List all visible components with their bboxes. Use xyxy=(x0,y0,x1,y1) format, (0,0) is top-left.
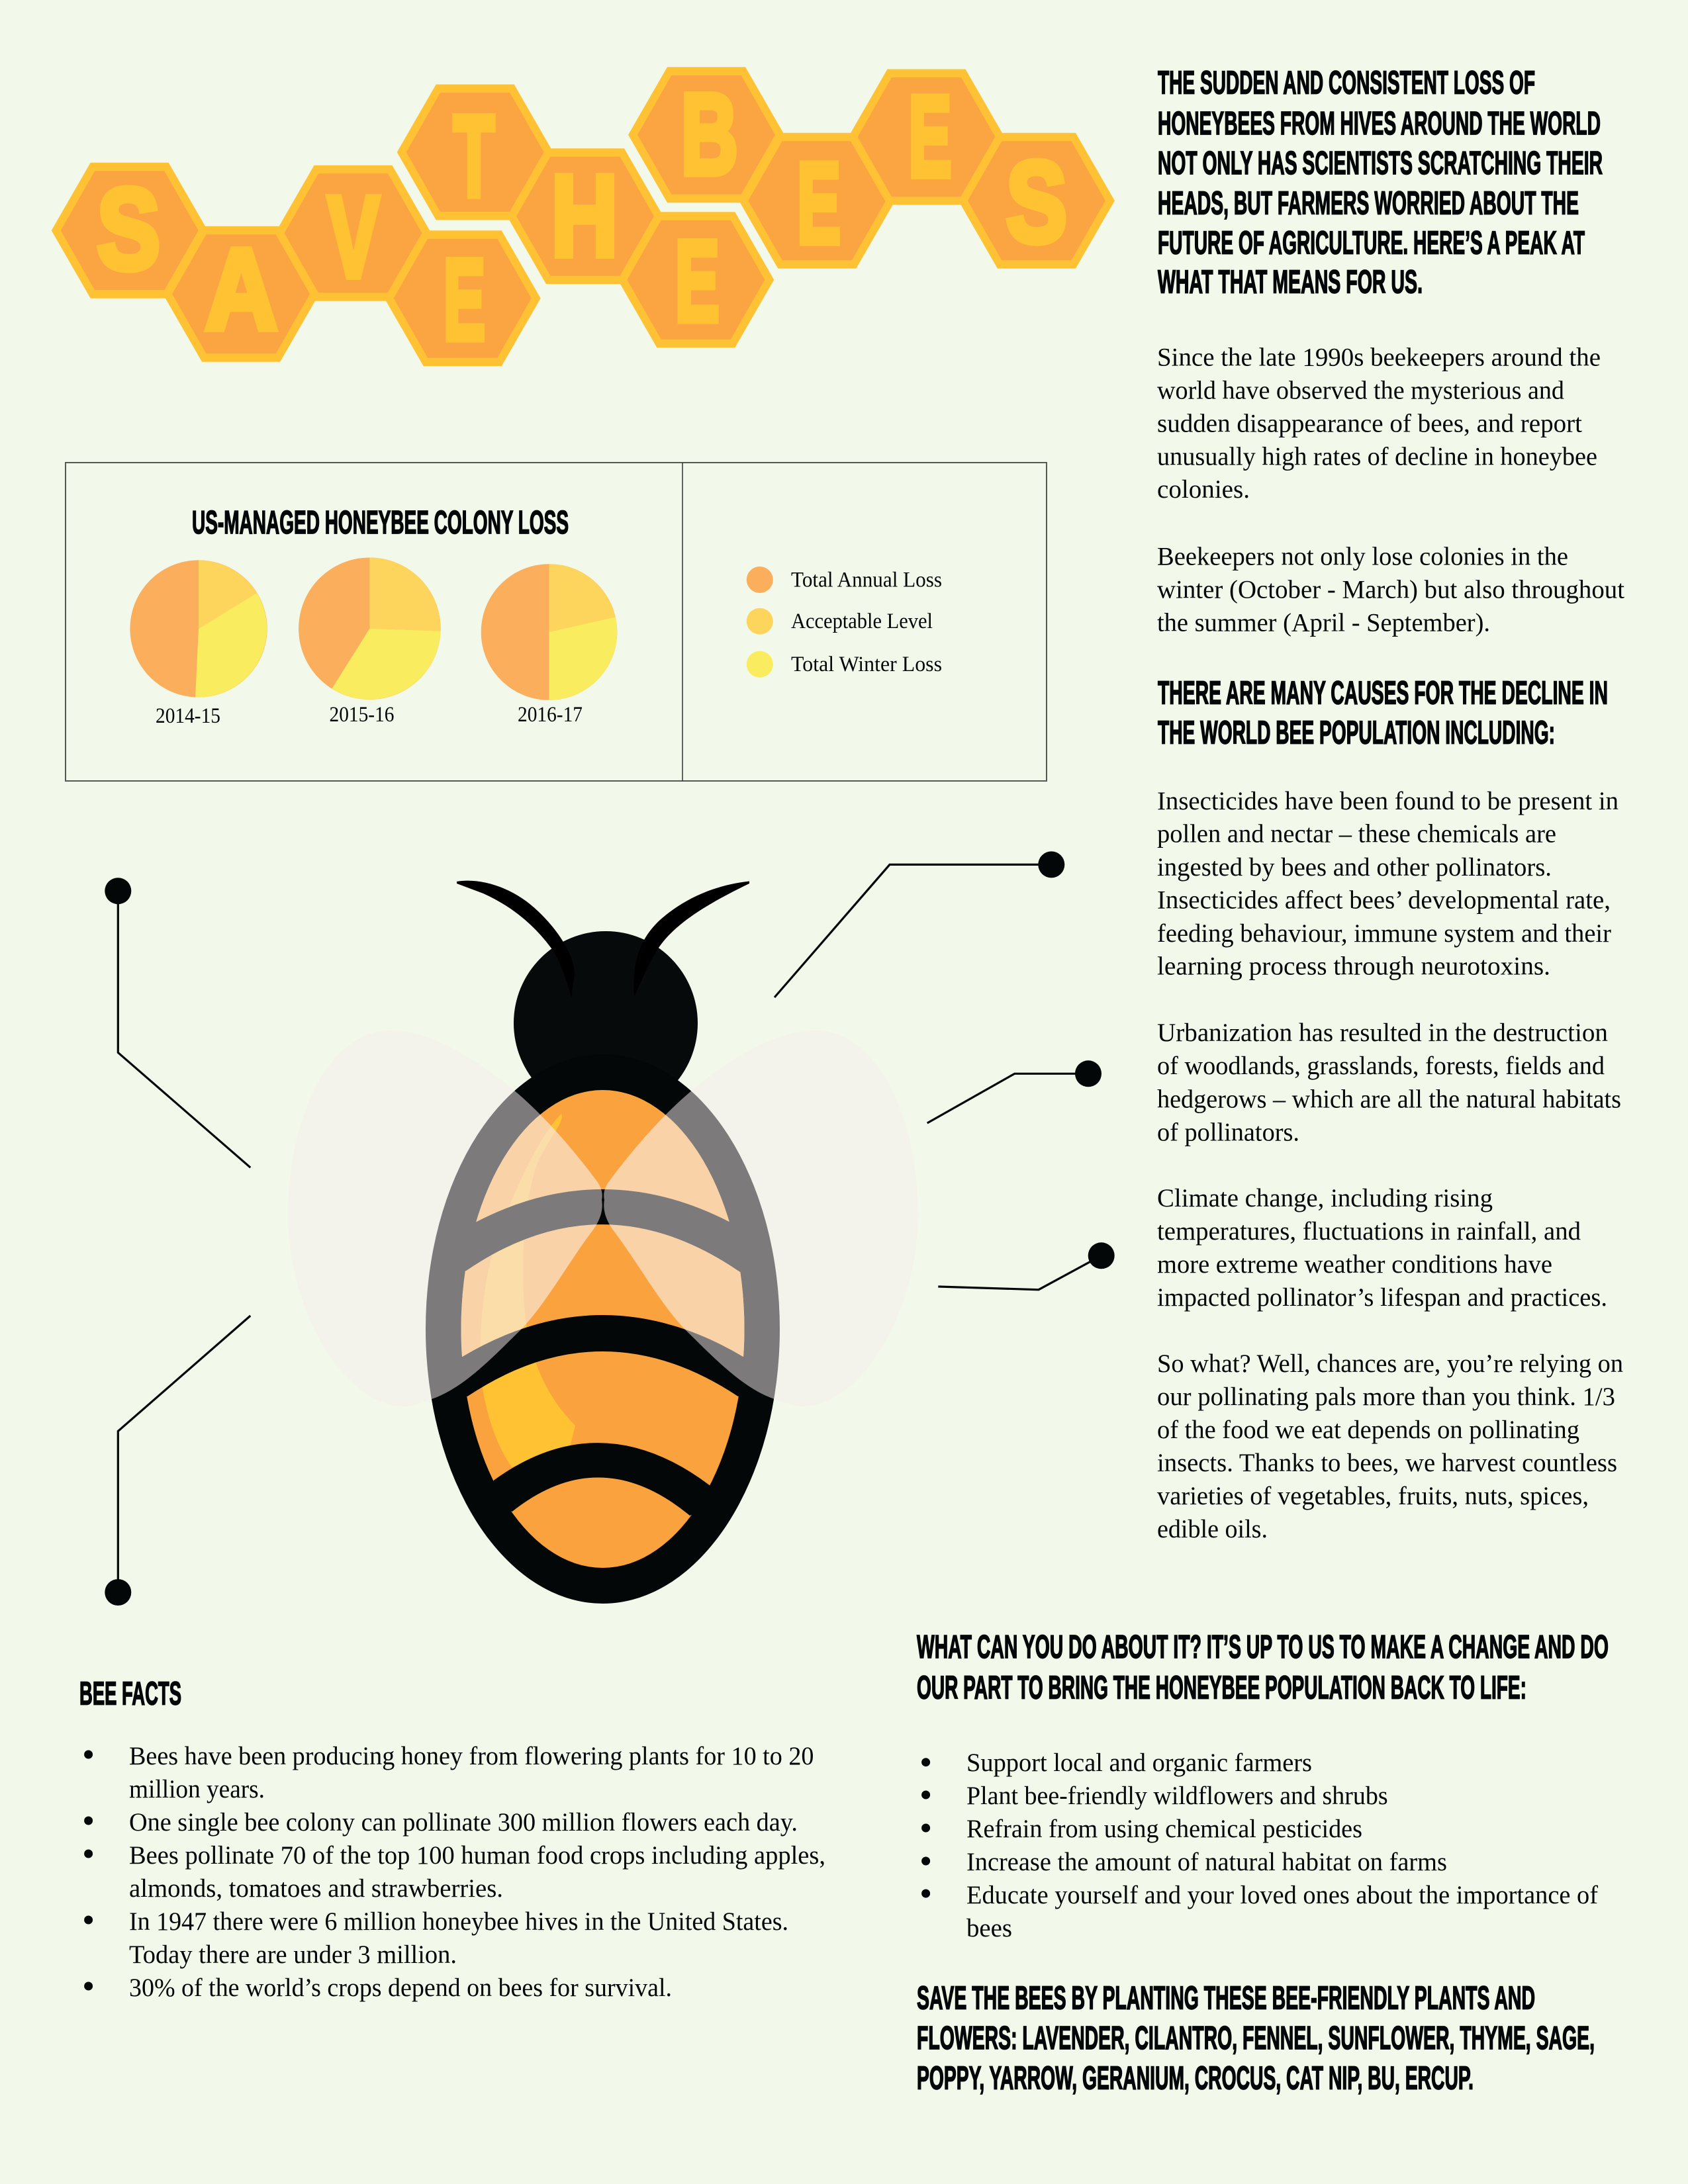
paragraph: since the late 1990s: world have observed the mysterious and xyxy=(1157,376,1564,404)
heading: causes of decline xyxy=(1158,675,1608,751)
body stripes xyxy=(434,1189,771,1516)
bee head xyxy=(514,931,698,1115)
list: actions: bees xyxy=(966,1914,1012,1942)
hexagon letter: H xyxy=(507,148,663,284)
legend: Acceptable Level xyxy=(791,610,933,633)
pie chart: 2015-16 xyxy=(299,557,441,700)
hexagon letter: A: A xyxy=(205,225,277,353)
paragraph: climate change xyxy=(1157,1184,1607,1312)
list: bee facts: 30% of the world’s crops depend on bees for survival. xyxy=(129,1974,672,2002)
paragraph: so what: varieties of vegetables, fruits, nuts, spices, xyxy=(1157,1482,1589,1510)
paragraph: urbanization: hedgerows – which are all the natural habitats xyxy=(1157,1085,1621,1114)
hexagon letter: E: E xyxy=(444,236,485,364)
heading: bee-friendly plants xyxy=(917,1980,1595,2096)
hexagon letter: E xyxy=(849,69,1005,205)
list: bee facts xyxy=(84,1742,825,2002)
list: bee facts: almonds, tomatoes and strawberries. xyxy=(129,1874,503,1903)
bee illustration xyxy=(426,880,780,1604)
hexagon letter: V: V xyxy=(328,173,380,301)
paragraph: insecticides xyxy=(1157,787,1618,981)
list: bee facts: In 1947 there were 6 million honeybee hives in the United States. xyxy=(129,1907,788,1936)
body under wings xyxy=(461,1115,744,1357)
paragraph: urbanization: of woodlands, grasslands, forests, fields and xyxy=(1157,1052,1605,1080)
list: actions: Support local and organic farmers xyxy=(966,1749,1312,1777)
hexagon letter: E: E xyxy=(797,139,841,267)
callout: upper right xyxy=(774,851,1064,997)
paragraph: beekeepers lose colonies xyxy=(1157,543,1624,637)
legend: Total Annual Loss xyxy=(791,569,942,592)
paragraph: insecticides: feeding behaviour, immune system and their xyxy=(1157,919,1611,948)
paragraph: insecticides: Insecticides have been found to be present in xyxy=(1157,787,1618,815)
hexagon letter: E xyxy=(385,230,541,366)
hexagon letter: S: S xyxy=(97,165,160,293)
hexagon letter: E xyxy=(618,212,774,347)
title: Save the Bees honeycomb xyxy=(52,67,1115,366)
body orange xyxy=(461,1090,744,1568)
list: actions: Educate yourself and your loved ones about the importance of xyxy=(966,1881,1598,1909)
paragraph: beekeepers lose colonies: winter (October - March) but also throughout xyxy=(1157,575,1624,604)
paragraph: since the late 1990s: unusually high rates of decline in honeybee xyxy=(1157,442,1597,471)
hexagon letter: T xyxy=(397,85,553,220)
bee body xyxy=(426,1054,780,1604)
paragraph: so what: our pollinating pals more than you think. 1/3 xyxy=(1157,1383,1615,1411)
legend: Total Winter Loss xyxy=(791,653,942,676)
yellow highlight xyxy=(481,1114,575,1467)
list: bee facts: million years. xyxy=(129,1775,265,1803)
callout: lower left xyxy=(105,1316,250,1606)
left antenna xyxy=(457,881,575,997)
paragraph: insecticides: ingested by bees and other pollinators. xyxy=(1157,853,1552,882)
list: bee facts: One single bee colony can pollinate 300 million flowers each day. xyxy=(129,1808,798,1837)
paragraph: climate change: temperatures, fluctuations in rainfall, and xyxy=(1157,1217,1581,1246)
list: bee facts: Bees have been producing honey from flowering plants for 10 to 20 xyxy=(129,1742,814,1770)
list: actions xyxy=(921,1749,1598,1942)
list: actions: Refrain from using chemical pesticides xyxy=(966,1815,1362,1843)
list: bee facts: Today there are under 3 million. xyxy=(129,1940,457,1969)
paragraph: beekeepers lose colonies: Beekeepers not only lose colonies in the xyxy=(1157,543,1568,571)
hexagon letter: S: S xyxy=(1006,138,1067,266)
paragraph: so what: insects. Thanks to bees, we harvest countless xyxy=(1157,1449,1617,1477)
paragraph: since the late 1990s: Since the late 1990s beekeepers around the xyxy=(1157,343,1601,371)
year labels xyxy=(156,703,583,728)
callout: middle right xyxy=(927,1060,1102,1123)
heading: what can you do xyxy=(917,1629,1609,1706)
hexagon letter: T: T xyxy=(453,92,494,220)
paragraph: since the late 1990s: sudden disappearance of bees, and report xyxy=(1157,409,1582,437)
paragraph: beekeepers lose colonies: the summer (April - September). xyxy=(1157,609,1490,637)
intro heading xyxy=(1158,65,1603,300)
paragraph: so what xyxy=(1157,1349,1623,1543)
pie chart: 2016-17 xyxy=(481,564,617,700)
legend xyxy=(747,567,942,678)
paragraph: insecticides: pollen and nectar – these chemicals are xyxy=(1157,819,1556,848)
chart heading: US-MANAGED HONEYBEE COLONY LOSS xyxy=(192,504,569,541)
paragraph: urbanization: Urbanization has resulted in the destruction xyxy=(1157,1019,1608,1047)
intro heading: WHAT THAT MEANS FOR US. xyxy=(1158,263,1423,300)
paragraph: climate change: more extreme weather conditions have xyxy=(1157,1250,1552,1279)
right antenna xyxy=(633,882,749,997)
pie chart: 2014-15 xyxy=(130,560,267,698)
paragraph: climate change: impacted pollinator’s lifespan and practices. xyxy=(1157,1283,1607,1312)
hexagon letter: E: E xyxy=(908,72,952,201)
callout: upper left xyxy=(105,878,250,1167)
paragraph: urbanization xyxy=(1157,1019,1621,1147)
paragraph: so what: of the food we eat depends on pollinating xyxy=(1157,1416,1579,1444)
hexagon letter: B: B xyxy=(680,70,738,199)
hexagon letter: H: H xyxy=(551,152,618,280)
paragraph: so what: So what? Well, chances are, you’re relying on xyxy=(1157,1349,1623,1378)
year labels: 2015-16 xyxy=(330,703,395,727)
paragraph: insecticides: learning process through neurotoxins. xyxy=(1157,952,1550,981)
paragraph: climate change: Climate change, including rising xyxy=(1157,1184,1493,1212)
hexagon letter: E xyxy=(739,133,895,269)
list: actions: Increase the amount of natural habitat on farms xyxy=(966,1848,1447,1876)
paragraph: since the late 1990s: colonies. xyxy=(1157,475,1250,504)
hexagon letter: S xyxy=(52,163,208,298)
hexagon letter: B xyxy=(628,67,784,203)
paragraph: insecticides: Insecticides affect bees’ developmental rate, xyxy=(1157,886,1611,915)
paragraph: since the late 1990s xyxy=(1157,343,1601,504)
left wing xyxy=(288,1030,602,1406)
hexagon letter: V xyxy=(275,165,432,301)
panel: colony loss chart xyxy=(66,463,1047,781)
hexagon letter: E: E xyxy=(675,217,720,345)
paragraph: so what: edible oils. xyxy=(1157,1515,1268,1543)
paragraph: urbanization: of pollinators. xyxy=(1157,1118,1299,1147)
year labels: 2016-17 xyxy=(518,703,583,727)
year labels: 2014-15 xyxy=(156,704,220,728)
right wing xyxy=(604,1030,918,1406)
callout: lower right xyxy=(938,1242,1115,1290)
hexagon letter: A xyxy=(163,225,319,362)
hexagon letter: S xyxy=(959,133,1115,269)
list: actions: Plant bee-friendly wildflowers and shrubs xyxy=(966,1782,1388,1810)
list: bee facts: Bees pollinate 70 of the top 100 human food crops including apples, xyxy=(129,1841,825,1870)
heading: bee facts: BEE FACTS xyxy=(79,1676,181,1711)
